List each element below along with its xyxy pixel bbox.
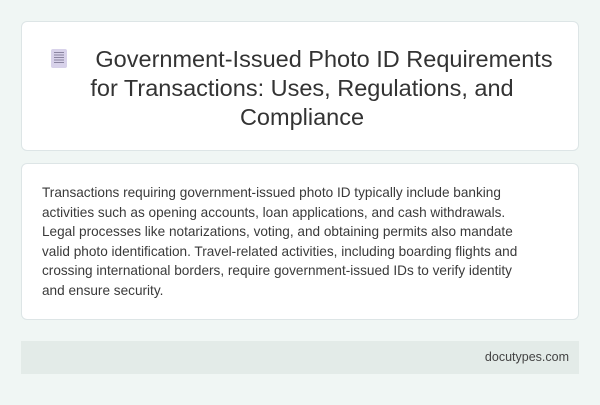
title: Government-Issued Photo ID Requirements for Transactions: Uses, Regulations, and Compliance [90,46,553,130]
panel: title [21,21,579,151]
icon: document [51,49,67,68]
text block: Transactions requiring government-issued photo ID typically include banking activities such as opening accounts, loan applications, and cash withdrawals. Legal processes like notarizations, voting, and obtaining permits also mandate valid photo identification. Travel-related activities, including boarding flights and crossing international borders, require government-issued IDs to verify identity and ensure security. [42,185,517,298]
panel: description [21,163,579,320]
footer text: docutypes.com [485,350,569,364]
footer [21,341,579,374]
